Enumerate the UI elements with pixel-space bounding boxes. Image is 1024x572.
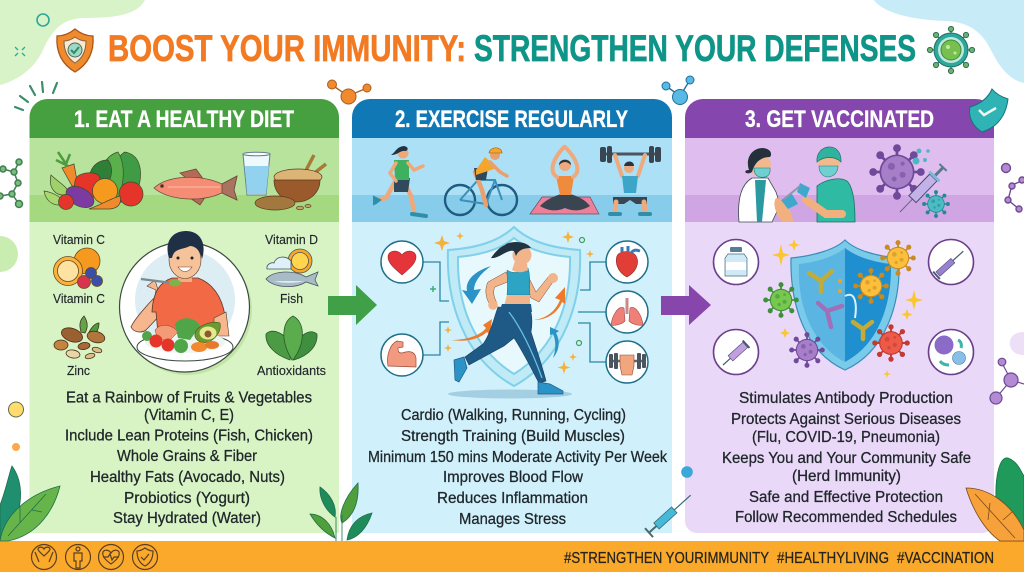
text block: vaccine list: Protects Against Serious Diseases <box>731 411 961 428</box>
text block: vaccine list <box>722 390 971 526</box>
decoration: ring <box>37 14 49 26</box>
background blob: left <box>0 236 18 272</box>
icon: title virus <box>927 26 975 74</box>
icon: bubbles <box>912 148 930 164</box>
leaves: bottom left <box>0 466 60 541</box>
icon: syringe <box>895 163 948 217</box>
arm left <box>131 296 163 332</box>
icon: yellow virus center <box>853 268 889 304</box>
icon: spinach leaves <box>266 316 317 360</box>
panel body <box>30 222 339 533</box>
text block: vaccine list: Safe and Effective Protection <box>749 489 943 506</box>
icon: heart circle <box>381 241 423 283</box>
molecule: right purple <box>1002 164 1024 212</box>
text block: exercise list: Reduces Inflammation <box>437 490 588 507</box>
panel heading: 2. EXERCISE REGULARLY <box>395 106 628 133</box>
panel: get vaccinated <box>685 89 1008 533</box>
icon: salmon <box>154 169 237 205</box>
decoration: yellow dot <box>8 402 24 417</box>
text block: exercise list: Strength Training (Build Muscles) <box>401 428 625 445</box>
leaves: bottom right <box>966 458 1024 541</box>
text block: exercise list <box>368 407 668 528</box>
footer hashtags: #STRENGTHEN YOURIMMUNITY <box>564 550 769 567</box>
label: vitamin d: Vitamin D <box>265 233 318 247</box>
text block: diet list: Eat a Rainbow of Fruits & Vegetables <box>66 390 312 406</box>
text block: exercise list: Minimum 150 mins Moderate Activity Per Week <box>368 449 668 466</box>
label: zinc: Zinc <box>67 364 90 378</box>
background blob: right <box>1010 332 1024 355</box>
illustration: person eating <box>120 231 252 375</box>
background blob: top right <box>874 0 1024 83</box>
image strip <box>352 138 672 222</box>
nurse <box>817 179 855 222</box>
label: fish: Fish <box>280 292 303 306</box>
decoration: sparkle <box>15 47 25 56</box>
illustration: doctor and nurse <box>739 147 855 222</box>
text block: vaccine list: (Herd Immunity) <box>792 468 901 485</box>
icon: dumbbell circle <box>606 341 648 383</box>
decoration: burst lines <box>15 82 57 110</box>
icon: corner shield <box>970 89 1008 132</box>
icon: lungs circle <box>606 291 648 333</box>
molecule: left green <box>0 159 22 208</box>
footer hashtags <box>564 550 994 567</box>
shirt <box>152 278 225 334</box>
icon: syringe circle top <box>928 240 974 284</box>
image strip <box>30 138 339 222</box>
text block: vaccine list: Follow Recommended Schedules <box>735 509 957 526</box>
molecule: lower right purple <box>990 358 1024 404</box>
text block: vaccine list: (Flu, COVID-19, Pneumonia) <box>752 429 940 446</box>
text block: diet list: Include Lean Proteins (Fish, Chicken) <box>65 428 313 444</box>
panel heading: 1. EAT A HEALTHY DIET <box>74 106 294 133</box>
icon: green virus <box>763 282 799 318</box>
sparkles <box>772 239 923 378</box>
text block: diet list: Healthy Fats (Avocado, Nuts) <box>90 469 285 486</box>
illustration: runner in shield <box>423 227 606 398</box>
runner figure <box>486 272 510 306</box>
head <box>178 270 192 282</box>
text block: diet list: (Vitamin C, E) <box>144 407 234 424</box>
icon: purple virus <box>869 144 925 200</box>
icon: citrus and berries <box>54 248 102 288</box>
text block: exercise list: Improves Blood Flow <box>443 469 583 486</box>
background blob: top left <box>0 0 145 85</box>
text block: diet list: Whole Grains & Fiber <box>117 448 258 465</box>
panel heading: 3. GET VACCINATED <box>745 106 934 133</box>
footer icons <box>32 544 158 570</box>
icon: grain bowl <box>255 155 326 210</box>
panel body <box>352 222 672 533</box>
text block: diet list <box>65 390 313 527</box>
icon: weightlifter <box>600 146 661 214</box>
text block: diet list: Probiotics (Yogurt) <box>124 490 250 507</box>
icon: glass of water <box>243 152 270 195</box>
icon: floating syringe <box>645 466 695 537</box>
label: antioxidants: Antioxidants <box>257 364 326 378</box>
icon: teal virus <box>922 190 950 218</box>
panel heading <box>352 99 672 138</box>
icon: jogger <box>374 146 426 216</box>
icon: cells circle <box>928 330 974 374</box>
image strip <box>685 138 994 222</box>
panel heading <box>30 99 339 138</box>
text block: vaccine list: Keeps You and Your Community Safe <box>722 450 971 467</box>
arrow: green <box>328 285 377 325</box>
leaves: panel two bottom <box>310 483 372 541</box>
icon: title shield <box>57 29 93 72</box>
panel: exercise regularly <box>352 99 672 533</box>
footer bar <box>0 541 1024 572</box>
illustration: shield and antibodies <box>791 240 899 370</box>
footer hashtags: #VACCINATION <box>897 550 994 567</box>
title: BOOST YOUR IMMUNITY: <box>108 28 466 69</box>
icon: vaccine vial circle <box>714 240 758 284</box>
arrow motifs <box>462 266 491 304</box>
text block: exercise list: Manages Stress <box>459 511 566 528</box>
arrow: purple <box>661 285 711 325</box>
icon: vegetables <box>44 152 143 212</box>
icon: nuts <box>54 316 106 360</box>
text block: vaccine list: Stimulates Antibody Production <box>739 390 953 407</box>
icon: anatomical heart circle <box>606 241 648 283</box>
plate and food <box>137 333 233 361</box>
icon: cyclist <box>445 148 517 215</box>
label: vitamin c second: Vitamin C <box>53 292 105 306</box>
icon: sun cloud and fish <box>266 249 318 287</box>
connectors <box>423 262 606 362</box>
icon: yoga pose <box>530 147 599 214</box>
label: vitamin c: Vitamin C <box>53 233 105 247</box>
panel body <box>685 222 994 533</box>
molecule: orange <box>328 80 371 104</box>
doctor <box>739 178 780 222</box>
icon: biceps circle <box>381 334 423 376</box>
title <box>108 28 916 69</box>
molecule: blue <box>662 76 694 104</box>
decoration: orange dot <box>12 443 20 451</box>
panel: eat a healthy diet <box>30 99 339 533</box>
footer hashtags: #HEALTHYLIVING <box>777 550 889 567</box>
text block: exercise list: Cardio (Walking, Running, Cycling) <box>401 407 626 424</box>
text block: diet list: Stay Hydrated (Water) <box>113 510 261 527</box>
icon: red virus <box>872 324 910 362</box>
icon: syringe circle bottom <box>714 330 758 374</box>
icon: purple virus lower <box>789 332 825 368</box>
panel heading <box>685 99 994 138</box>
sparkles <box>434 231 594 374</box>
icon: yellow virus top <box>880 240 916 276</box>
